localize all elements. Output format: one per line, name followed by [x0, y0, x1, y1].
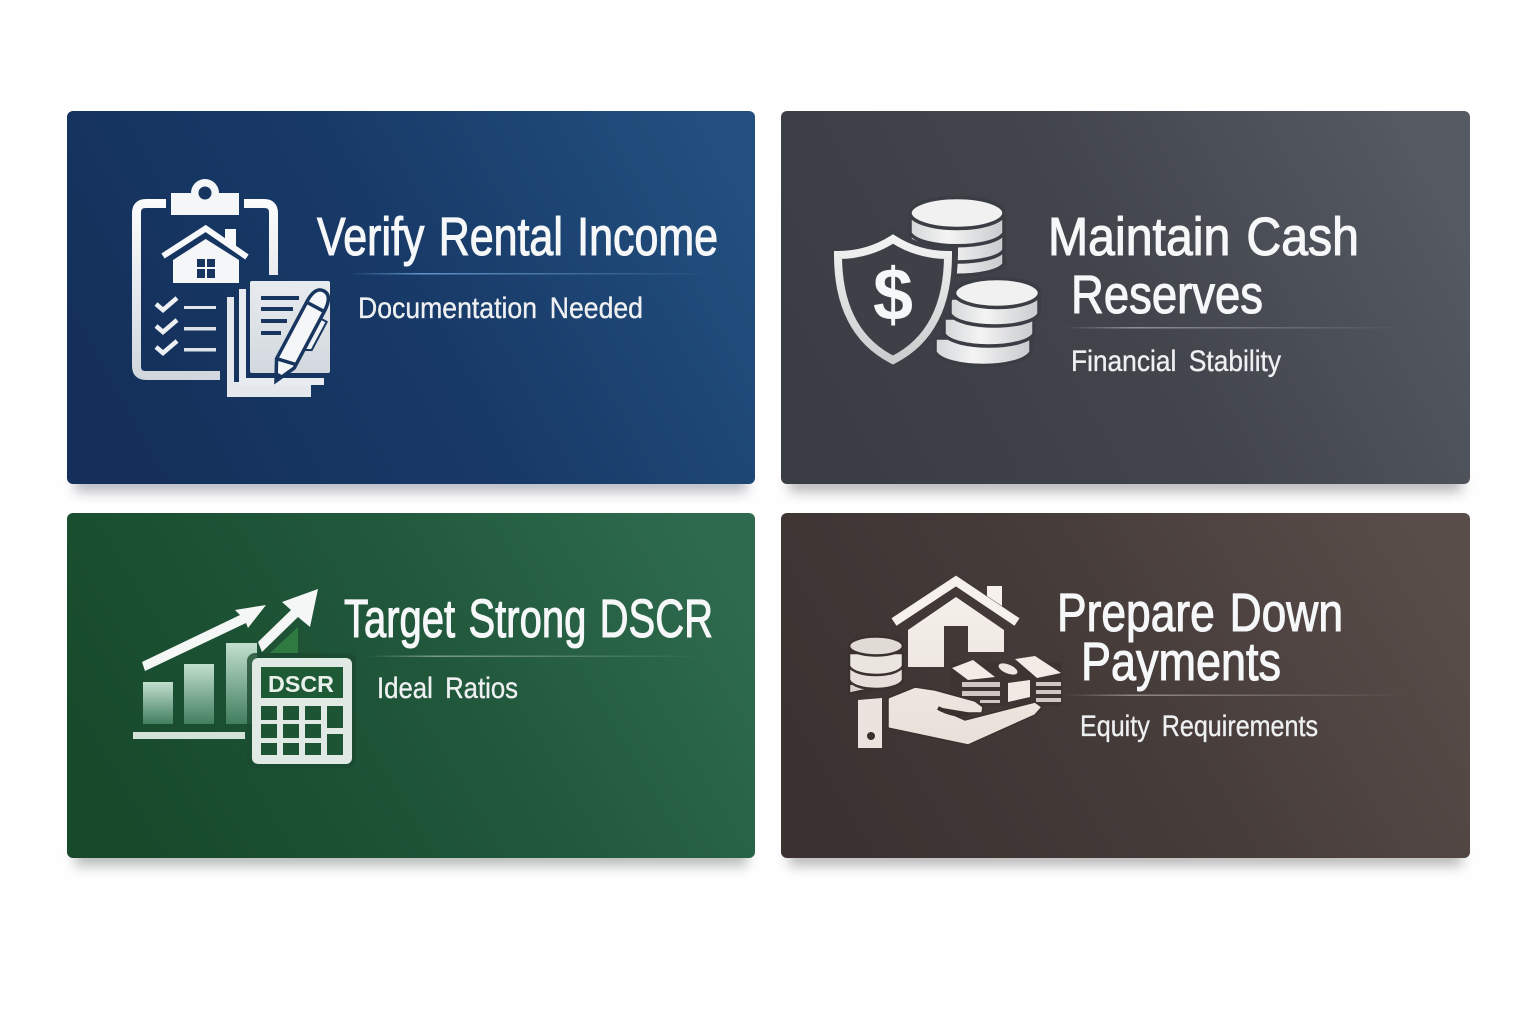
heading: prepare down payments: Prepare Down	[1057, 583, 1343, 643]
panel: maintain cash reserves	[781, 111, 1470, 492]
icon: house, coins, cash and hand	[849, 581, 1062, 748]
heading: maintain cash reserves: Maintain Cash	[1048, 207, 1359, 267]
heading: verify rental income: Verify Rental Income	[317, 207, 718, 267]
panel: maintain cash reserves: Reserves	[1071, 265, 1263, 325]
heading: target strong dscr: Target Strong DSCR	[344, 589, 713, 649]
panel: verify rental income	[67, 111, 755, 492]
icon: clipboard with house and document	[136, 179, 339, 397]
subtitle: documentation needed: Documentation Needed	[358, 292, 643, 325]
subtitle: financial stability: Financial Stability	[1071, 345, 1281, 378]
subtitle: equity requirements: Equity Requirements	[1080, 710, 1318, 743]
icon: rising chart and DSCR calculator	[133, 589, 356, 768]
icon: rising chart and DSCR calculator: DSCR	[268, 671, 334, 697]
icon: shield and coin stacks	[833, 198, 1040, 366]
icon: shield and coin stacks: $	[873, 253, 913, 336]
panel: prepare down payments	[781, 513, 1470, 866]
subtitle: ideal ratios: Ideal Ratios	[377, 672, 518, 705]
panel: prepare down payments: Payments	[1081, 632, 1281, 692]
panel: target strong dscr	[67, 513, 755, 866]
